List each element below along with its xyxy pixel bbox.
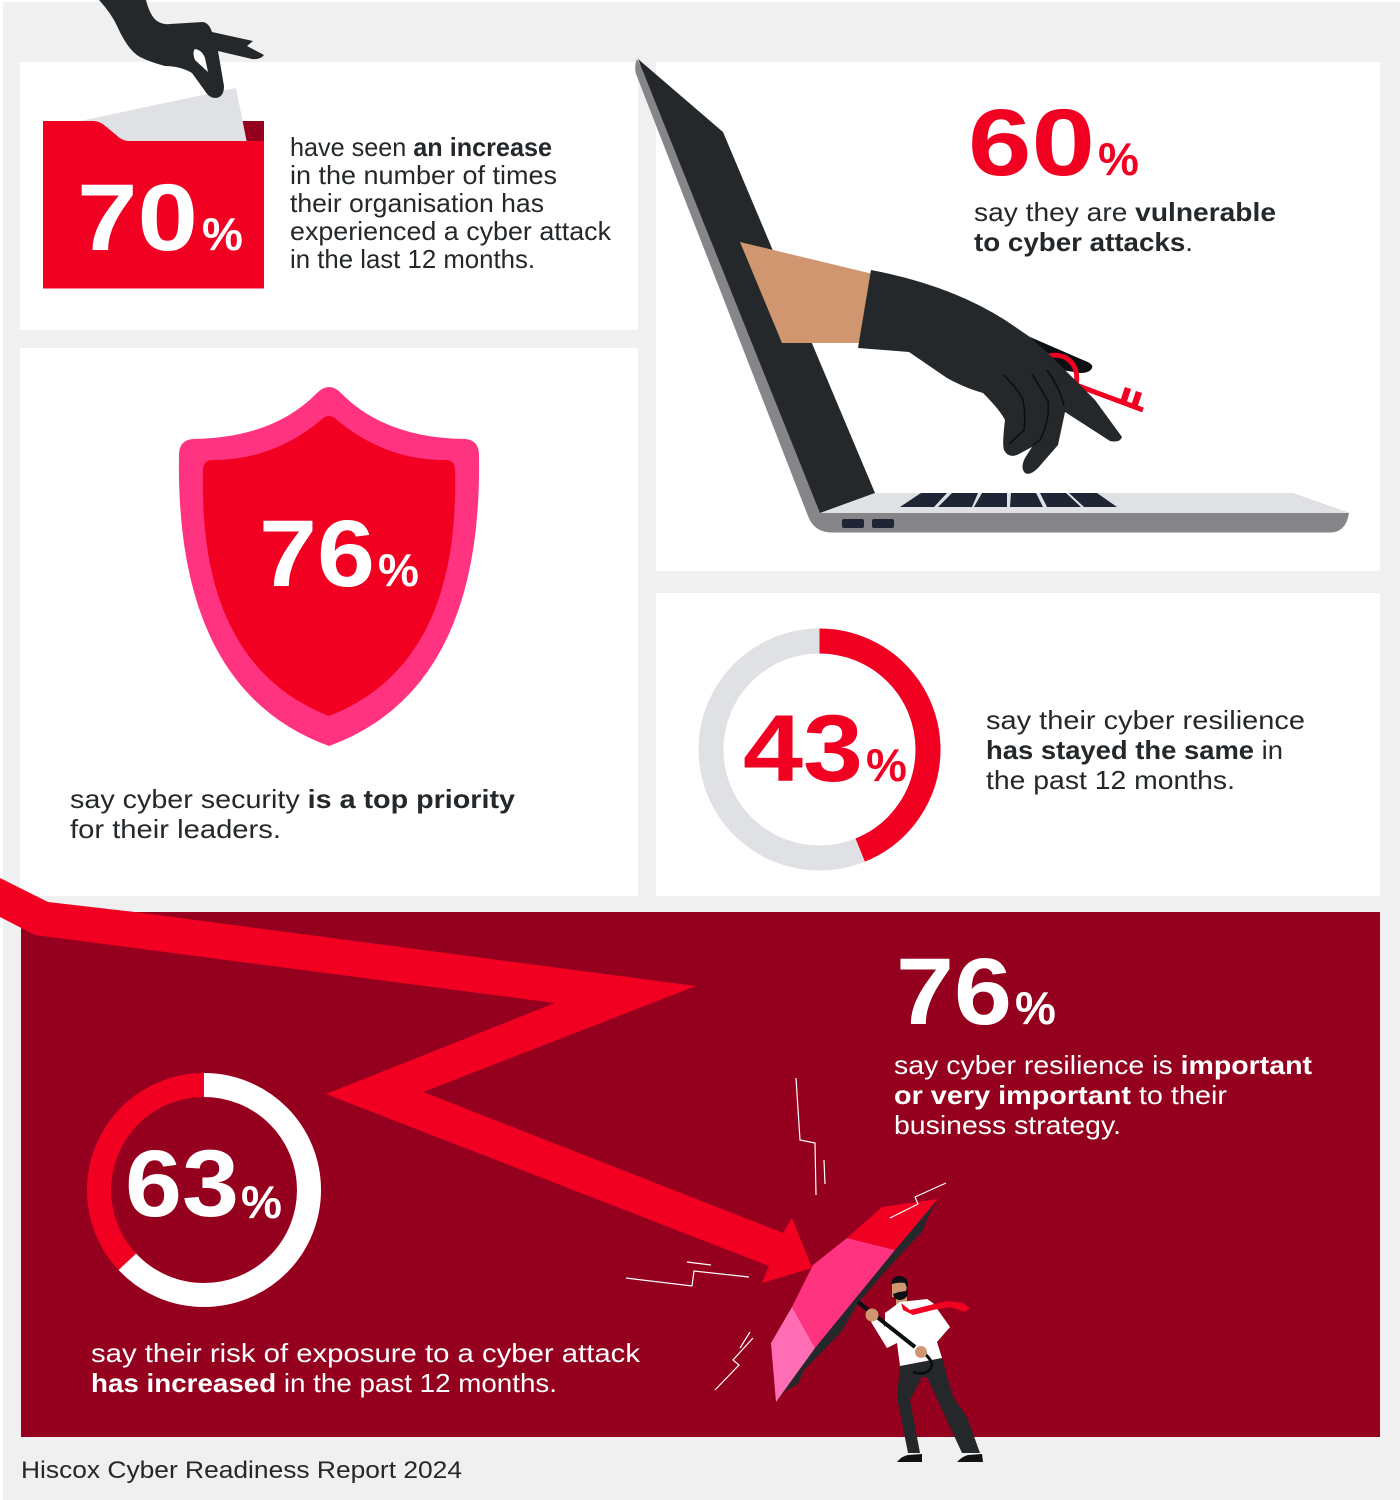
text: top priority description bbox=[70, 784, 516, 844]
stat: 63 percent sign: % bbox=[241, 1176, 282, 1228]
illustration: laptop bbox=[635, 59, 1349, 532]
text: important description bbox=[894, 1050, 1312, 1140]
chart: 43% donut bbox=[711, 641, 928, 858]
icon: folder with paper bbox=[43, 88, 264, 288]
text: 70% description: experienced a cyber attack bbox=[290, 216, 612, 246]
text: stayed the same description: say their cyber resilience bbox=[986, 705, 1305, 735]
panel: 70% increase bbox=[20, 0, 638, 330]
icon: shield bbox=[179, 387, 479, 746]
panel: 60% vulnerable bbox=[635, 59, 1380, 571]
footer: source: Hiscox Cyber Readiness Report 2024 bbox=[21, 1457, 462, 1484]
stat: 70%: 70 bbox=[77, 165, 198, 271]
text: stayed the same description bbox=[986, 705, 1305, 795]
text: risk of exposure description bbox=[91, 1338, 641, 1398]
text: vulnerable description bbox=[974, 197, 1276, 257]
text: vulnerable description: say they are vulnerable bbox=[974, 197, 1276, 227]
panel: dark red risk section bbox=[0, 878, 1380, 1462]
text: top priority description: for their leaders. bbox=[70, 814, 281, 844]
text: top priority description: say cyber security is a top priority bbox=[70, 784, 516, 814]
text: vulnerable description: to cyber attacks . bbox=[974, 227, 1193, 257]
illustration: gloved arm with key bbox=[740, 242, 1143, 474]
stat: 70 percent sign: % bbox=[202, 208, 243, 260]
stat: 43 percent sign: % bbox=[866, 739, 907, 791]
text: stayed the same description: has stayed the same in bbox=[986, 735, 1283, 765]
text: 70% description: their organisation has bbox=[290, 188, 544, 218]
stat: 43%: 43 bbox=[743, 696, 863, 802]
text: risk of exposure description: has increased in the past 12 months. bbox=[91, 1368, 557, 1398]
illustration: umbrella bbox=[771, 1199, 938, 1402]
icon: hand opening bbox=[194, 49, 208, 72]
stat: 60 percent sign: % bbox=[1098, 133, 1139, 185]
panel: 76% top priority bbox=[20, 348, 638, 896]
text: important description: say cyber resilience is important bbox=[894, 1050, 1312, 1080]
icon: lightning lines bbox=[626, 1078, 946, 1390]
text: stayed the same description: the past 12 months. bbox=[986, 765, 1235, 795]
stat: 76 percent sign shield: % bbox=[378, 544, 419, 596]
text: 70% description bbox=[290, 132, 612, 274]
text: 70% description: have seen an increase bbox=[290, 132, 552, 162]
text: 70% description: in the number of times bbox=[290, 160, 557, 190]
icon: gloved hand holding paper bbox=[99, 0, 264, 98]
text: important description: or very important to their bbox=[894, 1080, 1227, 1110]
text: important description: business strategy. bbox=[894, 1110, 1121, 1140]
stat: 76% shield: 76 bbox=[259, 501, 375, 607]
chart: 63% donut bbox=[99, 1085, 309, 1295]
stat: 76 percent sign important: % bbox=[1015, 982, 1056, 1034]
stat: 63%: 63 bbox=[125, 1131, 239, 1237]
panel: 43% stayed the same bbox=[656, 593, 1380, 896]
text: 70% description: in the last 12 months. bbox=[290, 244, 535, 274]
stat: 76% important: 76 bbox=[896, 939, 1012, 1045]
stat: 60%: 60 bbox=[968, 90, 1095, 196]
illustration: businessman bbox=[858, 1276, 983, 1462]
text: risk of exposure description: say their risk of exposure to a cyber attack bbox=[91, 1338, 641, 1368]
arrow: downward zigzag bbox=[0, 878, 812, 1283]
